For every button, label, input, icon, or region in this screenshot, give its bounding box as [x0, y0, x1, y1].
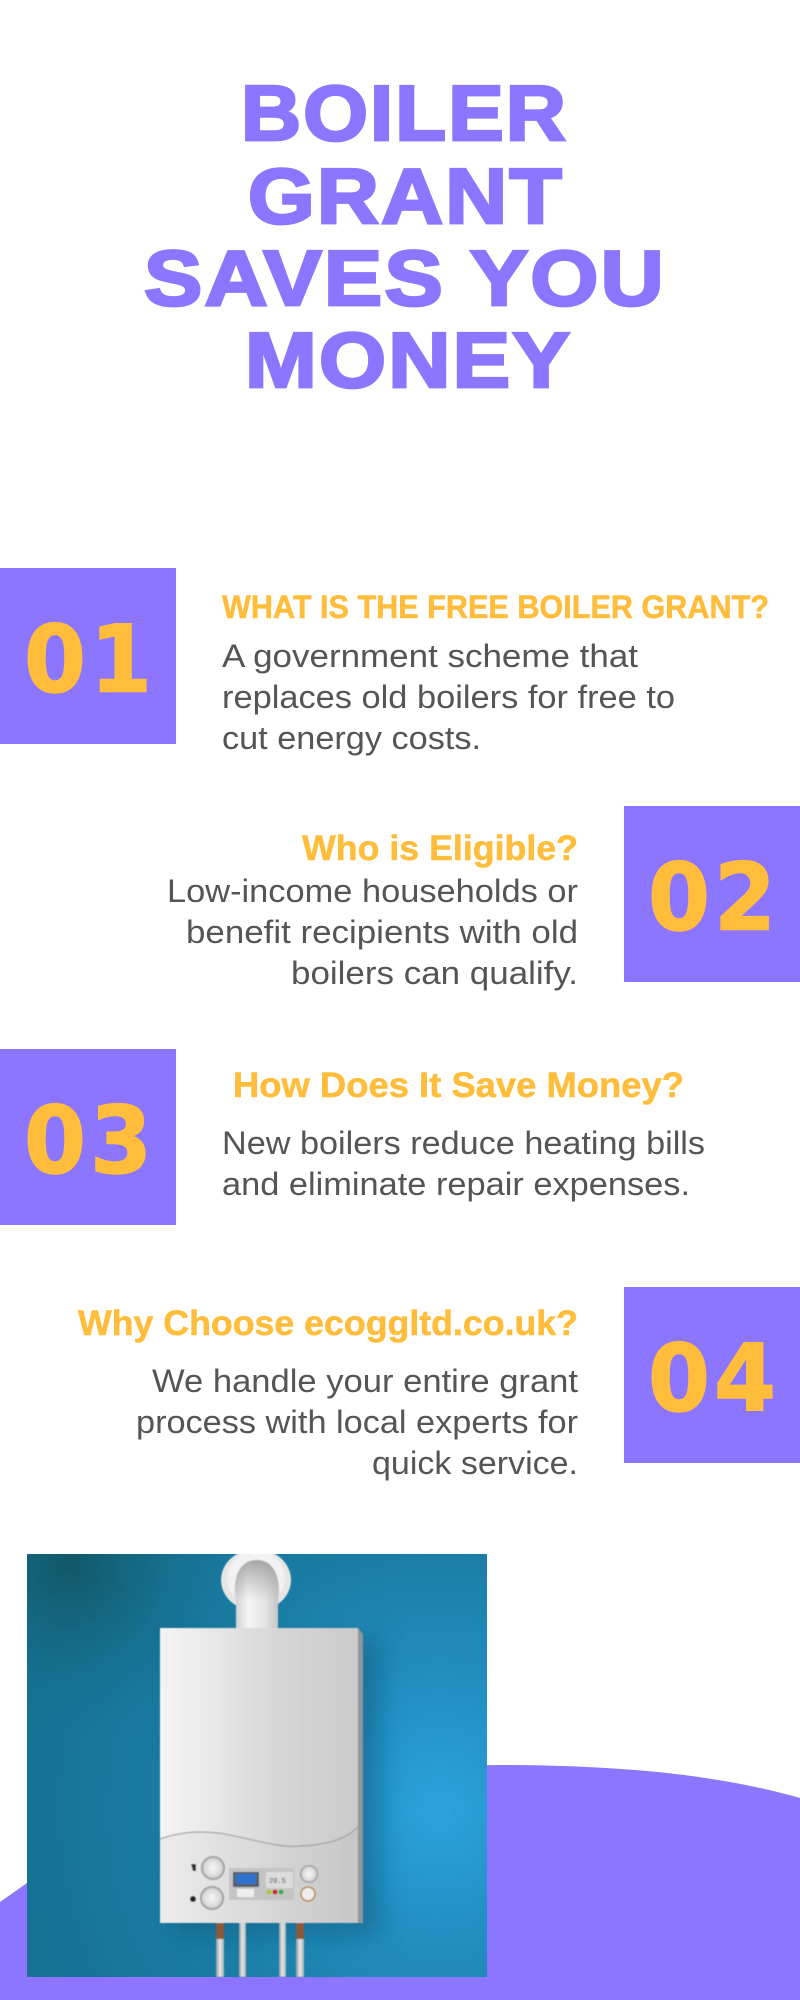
heading: who is eligible: Who is Eligible? — [302, 829, 578, 868]
text: step 04 description: quick service. — [372, 1445, 578, 1481]
text: step 03 description: and eliminate repair expenses. — [222, 1166, 690, 1202]
number box 01: 1 — [90, 606, 152, 714]
number box 04 — [624, 1287, 800, 1463]
blue wall — [27, 1554, 487, 1977]
illustration: wall-mounted boiler — [27, 1549, 487, 1977]
number box 01 — [0, 568, 176, 744]
number box 02: 2 — [714, 844, 776, 952]
flue pipe — [221, 1549, 291, 1628]
number box 03: 3 — [90, 1086, 152, 1194]
title: BOILER — [241, 69, 568, 157]
text: step 04 description: process with local experts for — [136, 1404, 578, 1440]
text: step 01 description: replaces old boilers for free to — [222, 679, 675, 715]
title — [144, 69, 666, 404]
number box 04: 4 — [714, 1324, 776, 1432]
title: MONEY — [245, 316, 572, 404]
number box 02 — [624, 806, 800, 982]
number box 02: 0 — [648, 844, 710, 952]
control panel: 20.5 — [269, 1878, 286, 1886]
background wave — [0, 1765, 800, 2000]
panel: step 01 — [0, 568, 769, 756]
panel: step 03 — [0, 1049, 705, 1225]
boiler shadow — [175, 1640, 380, 1936]
text: step 01 description: cut energy costs. — [222, 720, 481, 756]
text: step 04 description — [136, 1363, 578, 1481]
text: step 01 description: A government scheme that — [222, 638, 638, 674]
knobs and gauge — [190, 1856, 318, 1910]
heading: why choose ecoggltd: Why Choose ecoggltd.co.uk? — [78, 1304, 578, 1343]
text: step 04 description: We handle your entire grant — [152, 1363, 578, 1399]
number box 03 — [0, 1049, 176, 1225]
number box 01: 0 — [24, 606, 86, 714]
control panel — [229, 1868, 294, 1900]
heading: how does it save money: How Does It Save Money? — [233, 1066, 684, 1105]
text: step 02 description: Low-income households or — [167, 873, 578, 909]
number box 04: 0 — [648, 1324, 710, 1432]
text: step 03 description: New boilers reduce heating bills — [222, 1125, 705, 1161]
title: SAVES YOU — [144, 234, 666, 322]
text: step 02 description: boilers can qualify. — [291, 955, 578, 991]
panel: step 04 — [78, 1287, 800, 1481]
heading: what is the free boiler grant: WHAT IS THE FREE BOILER GRANT? — [222, 589, 769, 625]
text: step 02 description — [167, 873, 578, 991]
panel: step 02 — [167, 806, 800, 991]
text: step 01 description — [222, 638, 675, 756]
boiler casing — [160, 1628, 363, 1923]
text: step 02 description: benefit recipients with old — [186, 914, 578, 950]
heating pipes — [216, 1923, 304, 1977]
number box 03: 0 — [24, 1086, 86, 1194]
title: GRANT — [248, 152, 564, 240]
text: step 03 description — [222, 1125, 705, 1202]
